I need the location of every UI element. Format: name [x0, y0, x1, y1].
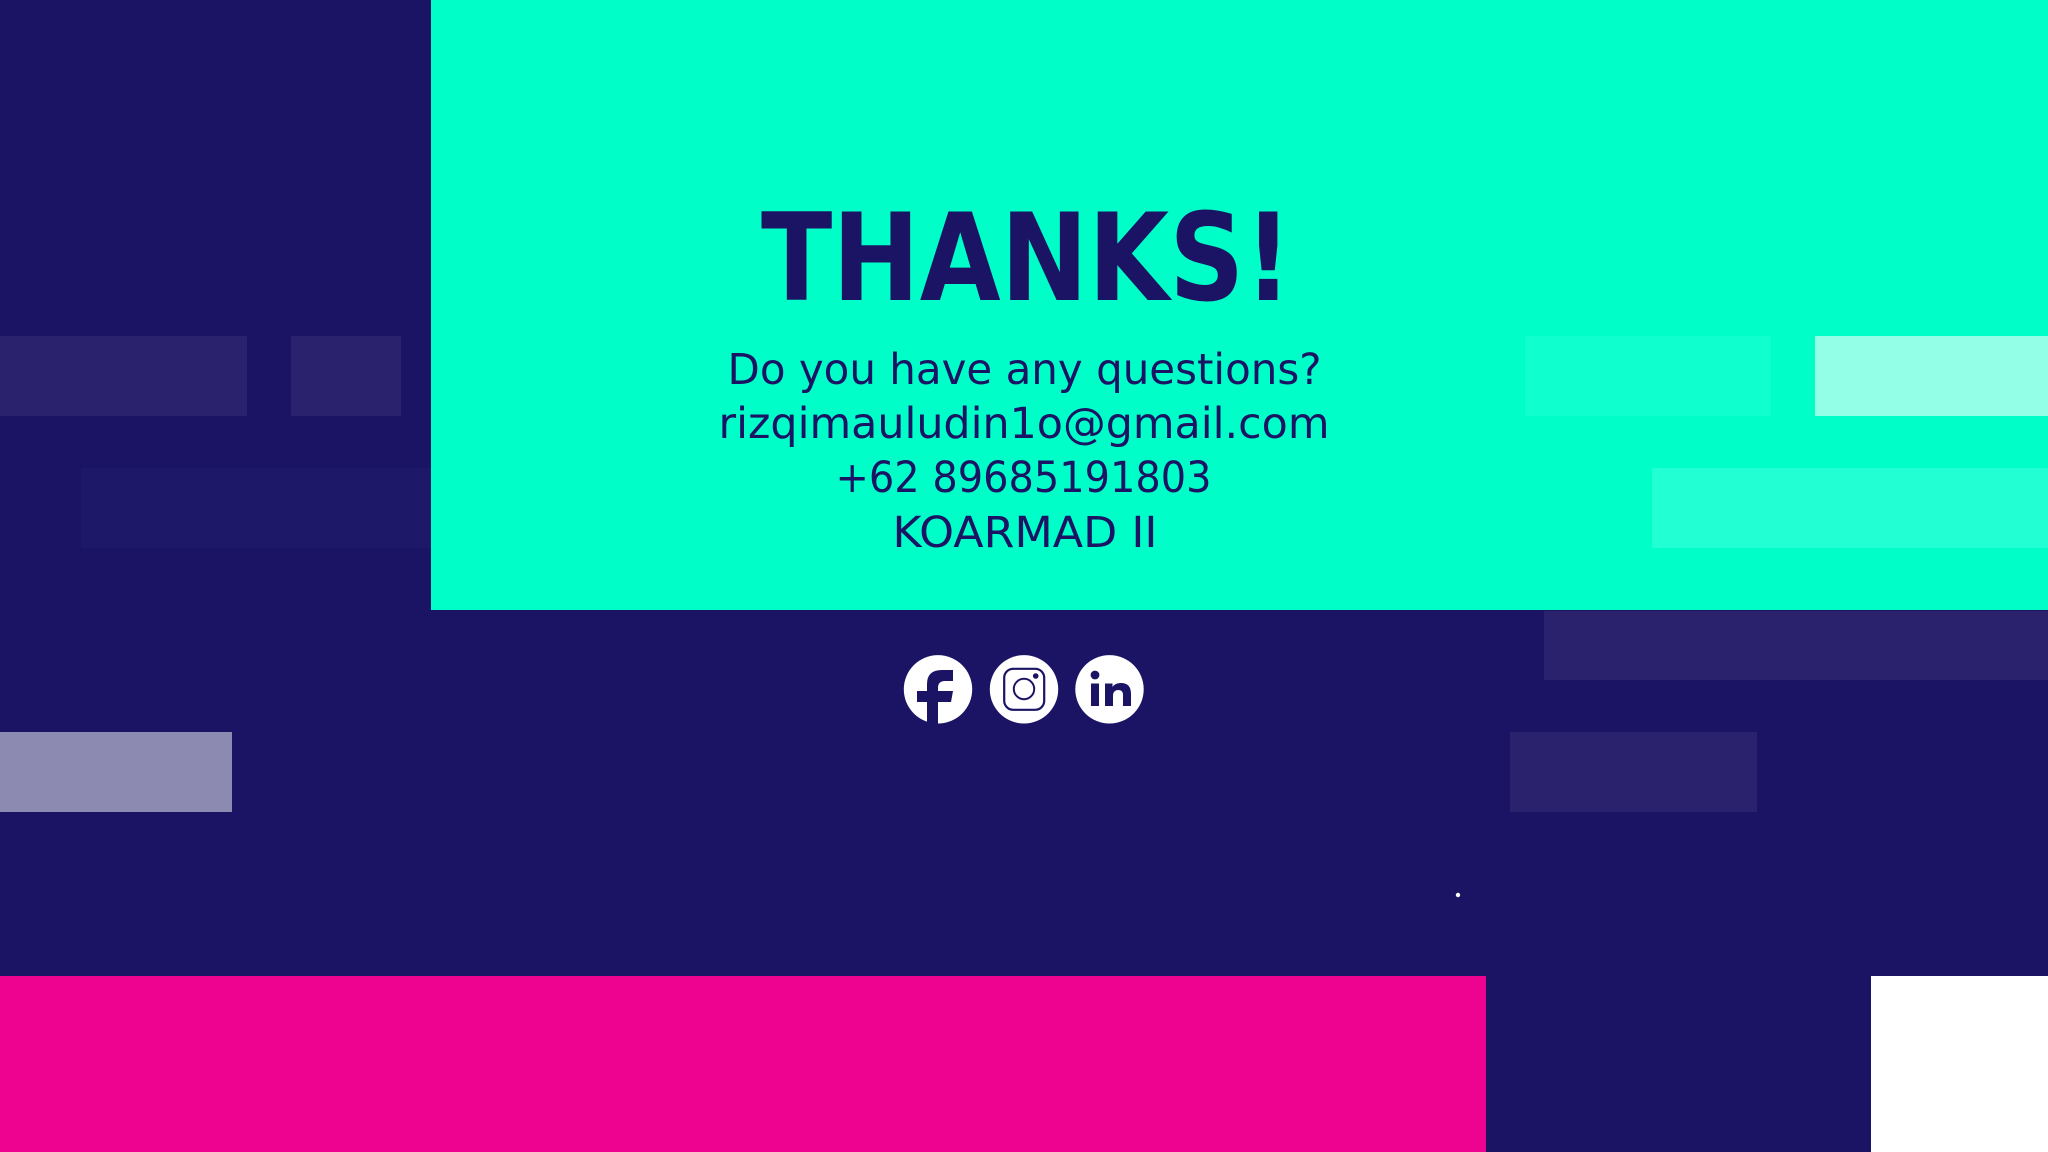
- bar: left top long: [0, 336, 247, 416]
- bar: mint pale: [1815, 336, 2048, 416]
- contact text: KOARMAD II: [892, 508, 1158, 558]
- contact text: +62 89685191803: [836, 453, 1212, 503]
- title: THANKS!: [761, 188, 1292, 329]
- panel: mint: [431, 0, 2048, 610]
- block: pink: [0, 976, 1486, 1152]
- block: white: [1871, 976, 2048, 1152]
- contact text: rizqimauludin1o@gmail.com: [718, 399, 1330, 449]
- contact text: [718, 345, 1330, 558]
- icon: linkedin: [1075, 655, 1144, 724]
- small white dot: [1456, 893, 1460, 897]
- social icons: [904, 655, 1144, 724]
- bar: mint faint: [1525, 336, 1771, 416]
- icon: facebook: [904, 655, 972, 724]
- bar: left top short: [291, 336, 401, 416]
- bar: left faint: [81, 468, 431, 548]
- contact text: Do you have any questions?: [728, 345, 1322, 395]
- bar: right navy upper: [1544, 611, 2048, 680]
- bar: mint light: [1652, 468, 2048, 548]
- icon: instagram: [990, 655, 1058, 724]
- bar: right navy lower: [1510, 732, 1757, 812]
- bar: left grey: [0, 732, 232, 812]
